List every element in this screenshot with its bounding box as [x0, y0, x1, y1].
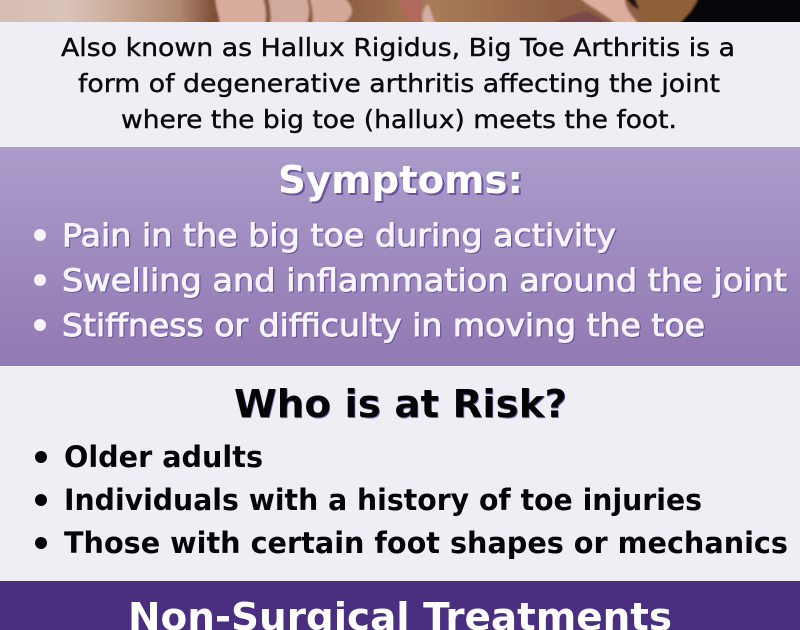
panel: symptoms: [0, 147, 800, 366]
risk list: [35, 440, 788, 560]
heading: risk: Who is at Risk?: [234, 382, 567, 426]
risk list: Individuals with a history of toe injuries: [64, 483, 702, 517]
risk list: Those with certain foot shapes or mechanics: [64, 526, 788, 560]
photo: hands on foot: [0, 0, 800, 26]
icon: finger one: [216, 0, 266, 26]
intro text block: where the big toe (hallux) meets the foot.: [121, 105, 677, 134]
intro text block: Also known as Hallux Rigidus, Big Toe Arthritis is a: [61, 33, 735, 62]
risk list: Older adults: [64, 440, 263, 474]
panel: non-surgical treatments: [0, 581, 800, 630]
symptom list shadow: Stiffness or difficulty in moving the toe: [63, 309, 706, 345]
heading: symptoms: Symptoms:: [278, 158, 523, 202]
symptom list shadow: Swelling and inflammation around the joint: [63, 264, 788, 300]
symptom list: Pain in the big toe during activity: [62, 218, 616, 254]
heading: risk shadow: Who is at Risk?: [235, 383, 568, 427]
icon: thumb right: [578, 0, 640, 26]
icon: finger three: [309, 0, 352, 26]
symptom list: [34, 218, 787, 344]
symptom list: Stiffness or difficulty in moving the toe: [62, 308, 705, 344]
panel: intro background: [0, 22, 800, 147]
icon: dark gap: [624, 0, 640, 10]
icon: finger two: [268, 0, 309, 26]
symptom list shadow: [63, 219, 788, 345]
icon: heel shadow: [548, 11, 614, 26]
symptom list: Swelling and inflammation around the joint: [62, 263, 787, 299]
icon: back of hand: [634, 0, 699, 26]
intro text block: form of degenerative arthritis affecting the joint: [78, 69, 720, 98]
intro text block: [61, 33, 735, 134]
panel: who is at risk: [0, 367, 800, 581]
icon: thumb left: [398, 0, 430, 26]
icon: nail: [422, 4, 436, 24]
heading: symptoms shadow: Symptoms:: [280, 160, 525, 204]
symptom list shadow: Pain in the big toe during activity: [63, 219, 617, 255]
